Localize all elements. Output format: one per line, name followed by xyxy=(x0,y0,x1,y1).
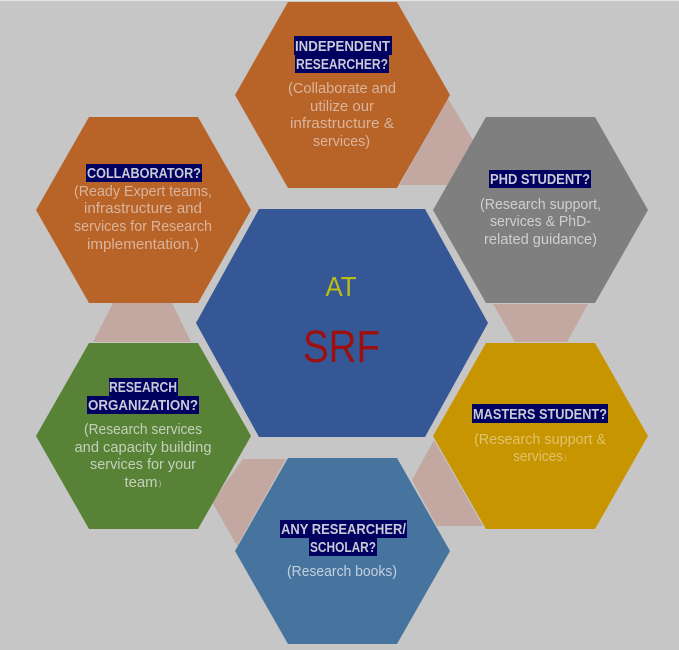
panel: any researcher or scholar: SCHOLAR? xyxy=(310,540,376,556)
heading: PHD STUDENT? xyxy=(490,172,590,188)
heading: RESEARCH xyxy=(109,380,177,396)
label: SRF: SRF xyxy=(303,321,380,372)
panel: research organization: ORGANIZATION? xyxy=(88,398,198,414)
description: services for Research xyxy=(74,219,212,235)
description: team xyxy=(124,475,158,491)
description xyxy=(480,197,601,248)
panel: PhD student xyxy=(433,117,648,303)
connector: independent to PhD xyxy=(400,97,473,185)
panel: any researcher or scholar xyxy=(235,458,450,644)
heading: INDEPENDENT xyxy=(295,39,390,55)
description: and capacity building xyxy=(74,440,212,456)
description: services & PhD- xyxy=(490,214,591,230)
label: AT: AT xyxy=(326,271,356,302)
description: (Research services xyxy=(84,422,202,438)
description: infrastructure & xyxy=(290,116,394,132)
description xyxy=(74,422,212,491)
description: (Research support, xyxy=(480,197,601,213)
panel: research organization xyxy=(36,343,251,529)
description xyxy=(474,432,606,465)
connector: research organization to collaborator xyxy=(93,303,191,342)
description xyxy=(74,184,212,253)
heading: ANY RESEARCHER/ xyxy=(281,522,406,538)
description: (Research support & xyxy=(474,432,606,448)
panel: center hexagon xyxy=(196,209,488,437)
description: ) xyxy=(159,481,161,488)
description: services) xyxy=(313,134,370,150)
connector: masters to any researcher xyxy=(412,440,483,526)
description: implementation.) xyxy=(87,237,199,253)
panel: collaborator xyxy=(36,117,251,303)
description: (Collaborate and xyxy=(288,81,396,97)
description: utilize our xyxy=(310,99,374,115)
heading: MASTERS STUDENT? xyxy=(473,407,607,423)
description xyxy=(288,81,396,150)
description: ) xyxy=(564,455,567,462)
heading: COLLABORATOR? xyxy=(87,166,201,182)
panel: independent researcher xyxy=(235,2,450,188)
connector: PhD to masters xyxy=(493,304,588,342)
description: related guidance) xyxy=(484,232,597,248)
panel: masters student xyxy=(433,343,648,529)
connector: any researcher to research organization xyxy=(212,459,286,546)
description: services xyxy=(513,449,563,465)
description: (Research books) xyxy=(287,564,397,580)
description: (Ready Expert teams, xyxy=(74,184,212,200)
description: services for your xyxy=(90,457,196,473)
panel: independent researcher: RESEARCHER? xyxy=(296,57,388,73)
description: infrastructure and xyxy=(84,201,202,217)
